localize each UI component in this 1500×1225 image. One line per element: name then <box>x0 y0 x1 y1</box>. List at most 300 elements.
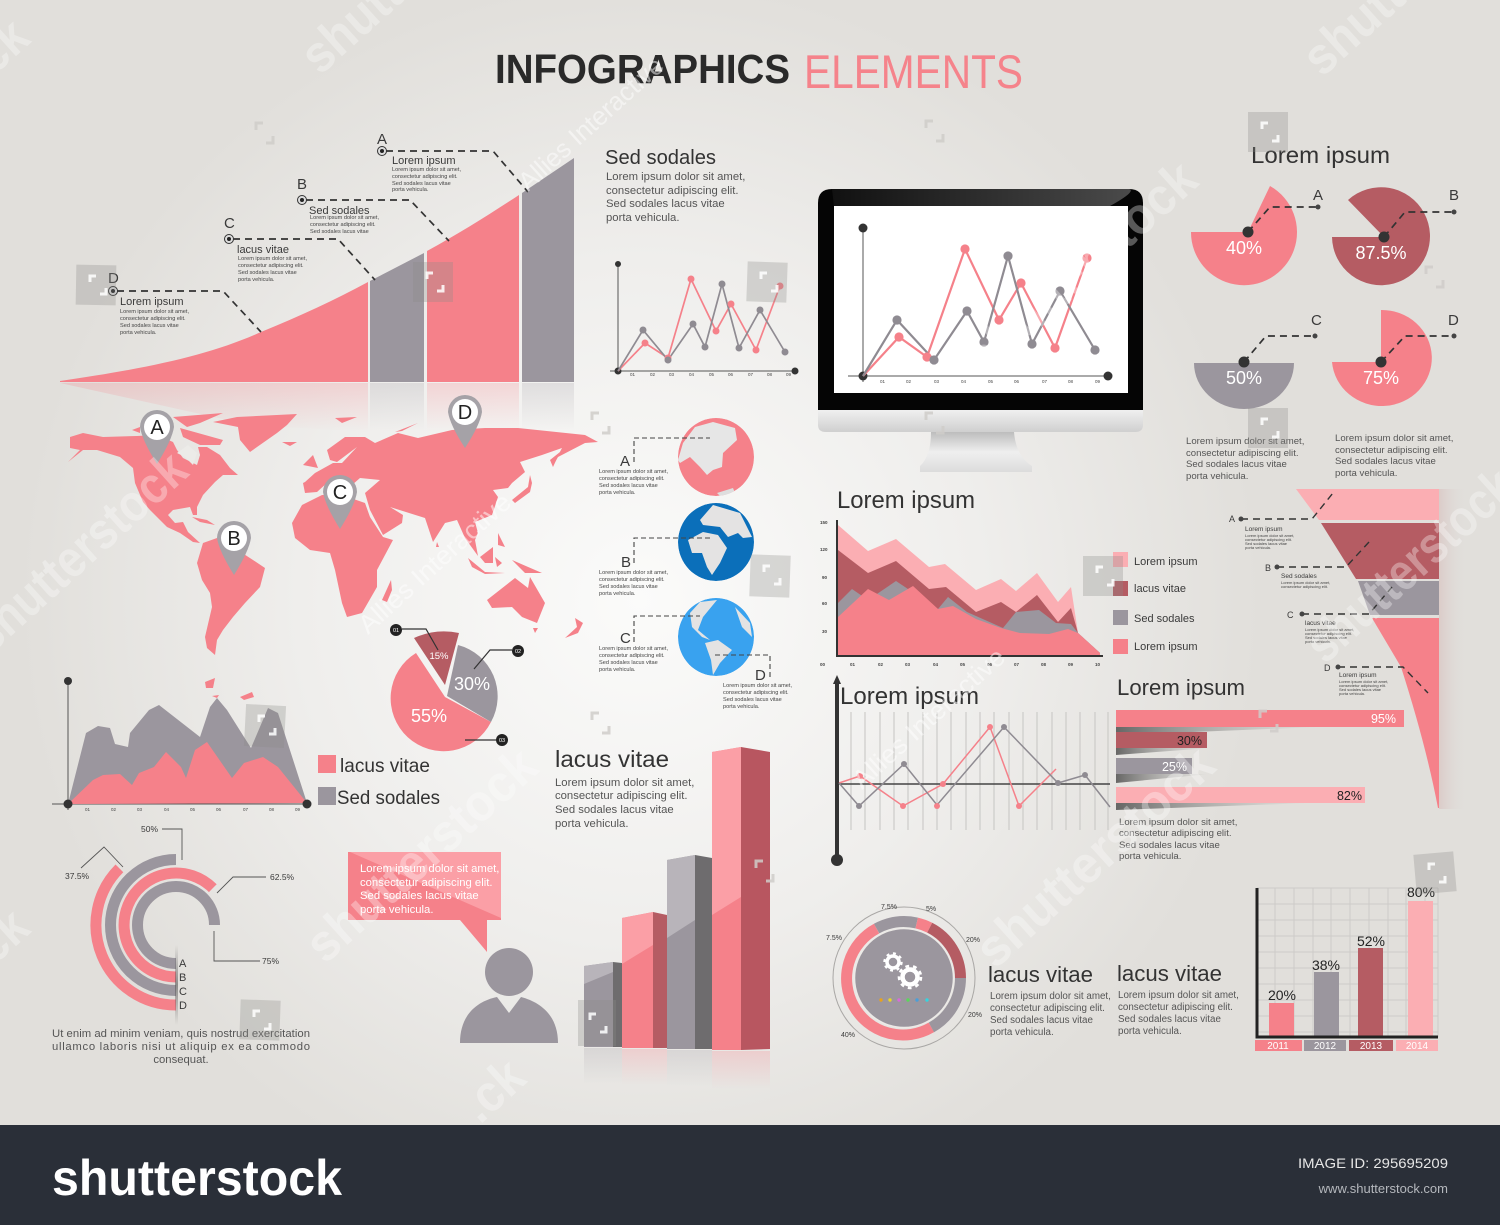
line chart: small: 03 <box>669 372 675 377</box>
pie B: 87.5% <box>1355 243 1407 263</box>
section C <box>1358 581 1439 615</box>
globe text B: B <box>621 554 631 571</box>
pin D: D <box>458 402 472 424</box>
red segment <box>930 928 960 978</box>
pin C <box>323 475 357 529</box>
bar 25: 25% <box>1162 760 1187 774</box>
pink slice <box>391 653 491 751</box>
axes <box>837 680 1110 860</box>
mountain area chart: 09 <box>295 807 301 812</box>
pie A <box>1191 186 1323 285</box>
pie B: B <box>1449 187 1459 204</box>
area segment three <box>427 195 519 382</box>
pie chart 55 30 15: 55% <box>411 706 447 726</box>
callout A: Lorem ipsum dolor sit amet, <box>1245 533 1294 538</box>
globe text D: porta vehicula. <box>723 704 760 710</box>
ring letters: A <box>179 958 187 970</box>
inner disc <box>854 928 954 1028</box>
percent labels: 20% <box>1268 987 1296 1003</box>
ring letters <box>179 958 187 1012</box>
callout A: A <box>377 131 387 148</box>
screen line chart: 06 <box>1014 379 1020 384</box>
monitor chin <box>818 410 1143 432</box>
bar 95: 95% <box>1371 712 1396 726</box>
bars <box>1269 1003 1294 1036</box>
text block: lacus vitae right: consectetur adipiscing elit. <box>1118 1002 1233 1013</box>
bar 30: 30% <box>1177 734 1202 748</box>
pin A <box>140 410 174 464</box>
text block: lacus vitae right: lacus vitae <box>1117 961 1222 986</box>
pink area <box>68 742 307 804</box>
bar 30 <box>1116 732 1210 755</box>
tick labels: 60 <box>822 601 828 606</box>
globe C <box>678 598 754 676</box>
paragraph: Sed sodales lacus vitae <box>1119 840 1220 851</box>
globe text A: A <box>620 453 630 470</box>
footer url: www.shutterstock.com <box>1318 1181 1448 1196</box>
heading and paragraph: Sed sodales <box>605 147 745 224</box>
ring letters: D <box>179 1000 187 1012</box>
globe text B: Lorem ipsum dolor sit amet, <box>599 570 668 576</box>
red slice <box>414 631 459 685</box>
vertical shadow <box>175 945 178 1025</box>
pie A: A <box>1313 187 1323 204</box>
text block: lacus vitae left: Sed sodales lacus vitae <box>990 1015 1093 1026</box>
callout C: consectetur adipiscing elit. <box>238 263 304 269</box>
callout lines <box>634 438 710 462</box>
pin C: C <box>333 482 347 504</box>
callout B: Sed sodales <box>1281 573 1318 580</box>
heading and paragraph: Sed sodales: Lorem ipsum dolor sit amet, <box>606 171 745 183</box>
tick labels: 150 <box>820 520 828 525</box>
heading and paragraph: lacus vitae: lacus vitae <box>555 746 669 772</box>
callout A: Sed sodales lacus vitae <box>1245 541 1288 546</box>
callout D: D <box>1324 663 1331 673</box>
text block: lacus vitae left <box>988 962 1111 1038</box>
Hudson bay <box>177 445 197 465</box>
screen line chart: 09 <box>1095 379 1101 384</box>
globe text A: consectetur adipiscing elit. <box>599 476 665 482</box>
watermark text: Allies Interactive <box>512 50 669 196</box>
icon: big gear <box>899 966 921 988</box>
heading and paragraph: lacus vitae: consectetur adipiscing elit. <box>555 790 688 802</box>
watermark text: shutterstock <box>964 735 1226 979</box>
tick labels: 120 <box>820 547 828 552</box>
heading and paragraph: Sed sodales: consectetur adipiscing elit. <box>606 185 738 197</box>
callout D <box>1324 663 1428 696</box>
icon: person <box>460 948 558 1043</box>
callout D: Sed sodales lacus vitae <box>120 323 179 329</box>
callout C: consectetur adipiscing elit. <box>1305 631 1352 636</box>
monitor gloss <box>832 189 1131 206</box>
paragraph right <box>1335 433 1453 479</box>
screen line chart: 01 <box>880 379 886 384</box>
globe text C: C <box>620 630 631 647</box>
bar chart 2011-2014 <box>1255 884 1438 1052</box>
legend: Lorem ipsum <box>1134 556 1198 568</box>
icon: small gear <box>884 953 902 971</box>
callout D: porta vehicula. <box>120 330 157 336</box>
screen line chart: 05 <box>988 379 994 384</box>
heading and paragraph: Sed sodales: porta vehicula. <box>606 212 679 224</box>
callout A: Lorem ipsum <box>392 155 456 167</box>
axes <box>837 520 1103 656</box>
tick labels: 09 <box>1068 662 1074 667</box>
callout B <box>1265 542 1369 589</box>
pin D <box>448 395 482 448</box>
callout B <box>297 176 449 241</box>
callout C: C <box>224 215 235 232</box>
callout C <box>224 215 375 283</box>
grey layer <box>838 581 1100 655</box>
year labels <box>1255 1040 1438 1052</box>
continents <box>68 413 598 700</box>
globe text D: Lorem ipsum dolor sit amet, <box>723 683 792 689</box>
area segment one <box>60 282 368 382</box>
screen line chart: 04 <box>961 379 967 384</box>
callout A: porta vehicula. <box>1245 545 1271 550</box>
section A <box>1296 489 1439 520</box>
globe text C: Lorem ipsum dolor sit amet, <box>599 646 668 652</box>
text block: lacus vitae left: Lorem ipsum dolor sit amet, <box>990 991 1111 1002</box>
funnel chart <box>1229 489 1467 809</box>
gauge with gears <box>826 904 982 1049</box>
globe text C <box>599 630 668 673</box>
chart: rising area with four callouts <box>60 131 574 432</box>
heading and paragraph: Sed sodales: Sed sodales lacus vitae <box>606 198 725 210</box>
annotations <box>81 829 266 961</box>
screen line chart <box>848 224 1112 384</box>
pie A: 40% <box>1226 238 1262 258</box>
mountain area chart: 05 <box>190 807 196 812</box>
callout D: consectetur adipiscing elit. <box>120 316 186 322</box>
legend: mountain chart: lacus vitae <box>340 755 430 777</box>
pink layer <box>838 586 1100 655</box>
text block: lacus vitae right: Lorem ipsum dolor sit amet, <box>1118 990 1239 1001</box>
pie C: C <box>1311 312 1322 329</box>
pie chart 55 30 15 <box>390 624 524 751</box>
paragraph right: Lorem ipsum dolor sit amet, <box>1335 433 1453 444</box>
watermark text: shutterstock <box>954 150 1209 387</box>
paragraph left: Sed sodales lacus vitae <box>1186 459 1287 470</box>
text block: lacus vitae left: lacus vitae <box>988 962 1093 987</box>
footer bar <box>0 1125 1500 1225</box>
watermark text: Allies Interactive <box>846 642 1011 794</box>
tick labels: 05 <box>960 662 966 667</box>
grey area <box>68 698 307 804</box>
gauge labels: 40% <box>841 1032 855 1039</box>
monitor screen <box>834 206 1128 393</box>
globe text D: Sed sodales lacus vitae <box>723 697 782 703</box>
gauge labels: 20% <box>966 937 980 944</box>
callout D <box>108 270 261 336</box>
watermark text: shutterstock <box>294 737 549 974</box>
paragraph under arcs: ullamco laboris nisi ut aliquip ex ea commodo <box>52 1041 310 1053</box>
section B <box>1321 523 1439 579</box>
bar 2012 <box>1314 972 1339 1036</box>
ring A <box>138 886 215 964</box>
paragraph: porta vehicula. <box>1119 851 1181 862</box>
gauge labels: 5% <box>926 906 936 913</box>
annotation labels: 75% <box>262 956 279 966</box>
mountain area chart: 07 <box>243 807 249 812</box>
title: ELEMENTS <box>804 45 1023 98</box>
globe text D: consectetur adipiscing elit. <box>723 690 789 696</box>
callout D: porta vehicula. <box>1339 691 1365 696</box>
marker 03: 03 <box>499 738 505 744</box>
grey series <box>839 727 1110 807</box>
line chart: small: 07 <box>748 372 754 377</box>
heading: Lorem ipsum <box>1117 675 1245 700</box>
light pink layer <box>838 525 1100 655</box>
paragraph under arcs: consequat. <box>153 1054 209 1066</box>
annotation labels: 62.5% <box>270 872 295 882</box>
pie C: 50% <box>1226 368 1262 388</box>
globe B <box>678 503 754 581</box>
bar 2014 <box>1408 901 1433 1036</box>
ring B <box>124 873 213 977</box>
pie D: D <box>1448 312 1459 329</box>
tick labels: 30 <box>822 629 828 634</box>
tick labels: 01 <box>850 662 856 667</box>
paragraph left <box>1186 436 1304 482</box>
heading: Lorem ipsum <box>840 683 979 710</box>
bar 82: 82% <box>1337 789 1362 803</box>
pie chart 55 30 15: 15% <box>429 651 449 662</box>
line chart: small: 08 <box>767 372 773 377</box>
monitor stand <box>920 432 1032 472</box>
callout B: B <box>297 176 307 193</box>
globe text C: Sed sodales lacus vitae <box>599 660 658 666</box>
globe text A: Lorem ipsum dolor sit amet, <box>599 469 668 475</box>
heading and paragraph: lacus vitae <box>555 746 694 830</box>
line chart with vertical grid <box>831 675 1110 866</box>
pie B <box>1332 187 1459 285</box>
text block: lacus vitae right: Sed sodales lacus vitae <box>1118 1014 1221 1025</box>
bar 95 <box>1116 710 1404 735</box>
callout B: consectetur adipiscing elit. <box>310 222 376 228</box>
gauge labels: 20% <box>968 1012 982 1019</box>
paragraph <box>1119 817 1237 862</box>
callout A: consectetur adipiscing elit. <box>1245 537 1292 542</box>
callout B: Sed sodales lacus vitae <box>310 229 369 235</box>
text block: lacus vitae left: porta vehicula. <box>990 1027 1054 1038</box>
globes with callouts <box>599 418 792 710</box>
legend: Lorem ipsum <box>1134 641 1198 653</box>
tick labels: 03 <box>905 662 911 667</box>
bar 3 <box>667 855 712 1049</box>
speech bubble <box>348 852 501 952</box>
callout B: B <box>1265 563 1271 573</box>
ring letters: C <box>179 986 187 998</box>
year labels: 2012 <box>1314 1041 1337 1052</box>
speech bubble: consectetur adipiscing elit. <box>360 877 492 889</box>
callout C: Sed sodales lacus vitae <box>1305 635 1348 640</box>
mountain area chart: 02 <box>111 807 117 812</box>
annotation labels: 50% <box>141 824 158 834</box>
screen line chart: 07 <box>1042 379 1048 384</box>
callout line B <box>634 538 710 563</box>
callout C: Lorem ipsum dolor sit amet, <box>238 256 307 262</box>
pink series <box>839 727 1056 806</box>
globe text C: porta vehicula. <box>599 667 636 673</box>
paragraph under arcs: Ut enim ad minim veniam, quis nostrud exercitation <box>52 1028 310 1040</box>
mountain area chart: 01 <box>85 807 91 812</box>
paragraph right: Sed sodales lacus vitae <box>1335 456 1436 467</box>
callout C: lacus vitae <box>237 244 289 256</box>
globe text D: D <box>755 667 766 684</box>
year labels: 2013 <box>1360 1041 1383 1052</box>
heading: Lorem ipsum <box>1251 142 1390 168</box>
paragraph left: porta vehicula. <box>1186 471 1248 482</box>
paragraph under arcs <box>52 1028 310 1066</box>
callout D: Sed sodales lacus vitae <box>1339 687 1382 692</box>
callout C <box>1287 587 1392 644</box>
percent labels: 80% <box>1407 884 1435 900</box>
bar 2013 <box>1358 948 1383 1036</box>
callout A: Lorem ipsum dolor sit amet, <box>392 167 461 173</box>
speech bubble: Lorem ipsum dolor sit amet, <box>360 863 499 875</box>
callout C: C <box>1287 610 1294 620</box>
gauge labels: 7.5% <box>881 904 897 911</box>
callout D: D <box>108 270 119 287</box>
paragraph: consectetur adipiscing elit. <box>1119 828 1232 839</box>
watermark text: Allies Interactive <box>352 487 517 639</box>
callout D: Lorem ipsum <box>1339 672 1377 679</box>
percent labels: 38% <box>1312 957 1340 973</box>
marker 01: 01 <box>393 628 399 634</box>
pink segment <box>847 929 931 1035</box>
legend <box>1113 552 1198 654</box>
bar 4 <box>712 747 770 1050</box>
gauge labels: 7.5% <box>826 935 842 942</box>
bar 82 <box>1116 787 1365 810</box>
globe text B <box>599 554 668 597</box>
heading: Lorem ipsum <box>837 487 975 514</box>
bubble highlight <box>350 852 501 918</box>
mountain area chart: 04 <box>164 807 170 812</box>
callout C: lacus vitae <box>1305 620 1336 627</box>
callout line C <box>634 616 700 642</box>
line chart: small <box>610 261 798 377</box>
annotation labels <box>65 824 295 966</box>
paragraph: Lorem ipsum dolor sit amet, <box>1119 817 1237 828</box>
footer logo: shutterstock <box>52 1150 342 1206</box>
heading and paragraph: Sed sodales: Sed sodales <box>605 147 716 169</box>
funnel shadow <box>1439 489 1467 809</box>
globe text A: porta vehicula. <box>599 490 636 496</box>
small pink segment <box>917 923 930 928</box>
bar reflections <box>584 1048 770 1089</box>
ring D <box>96 868 176 1005</box>
callout D: consectetur adipiscing elit. <box>1339 683 1386 688</box>
callout line D <box>713 655 770 677</box>
callout C: Sed sodales lacus vitae <box>238 270 297 276</box>
screen line chart: 08 <box>1068 379 1074 384</box>
text block: lacus vitae left: consectetur adipiscing elit. <box>990 1003 1105 1014</box>
tick labels: 04 <box>933 662 939 667</box>
mountain area chart: 03 <box>137 807 143 812</box>
callout A: porta vehicula. <box>392 187 429 193</box>
legend: lacus vitae <box>1134 583 1186 595</box>
grey top segment <box>877 922 917 929</box>
stacked area chart <box>820 487 1198 667</box>
callout C: porta vehicula. <box>238 277 275 283</box>
watermark text: .ck <box>449 1047 536 1134</box>
title <box>495 45 1023 98</box>
heading and paragraph: lacus vitae: Lorem ipsum dolor sit amet, <box>555 777 694 789</box>
axes <box>1257 888 1438 1037</box>
marker 02: 02 <box>515 649 521 655</box>
mountain area chart: 08 <box>269 807 275 812</box>
bar 1 <box>584 962 622 1047</box>
legend: mountain chart <box>318 755 440 809</box>
tick labels: 90 <box>822 575 828 580</box>
percent labels <box>1268 884 1435 1003</box>
callout D: Lorem ipsum <box>120 296 184 308</box>
text block: lacus vitae right: porta vehicula. <box>1118 1026 1182 1037</box>
colored dots <box>879 998 929 1002</box>
paragraph right: consectetur adipiscing elit. <box>1335 445 1448 456</box>
grey right segment <box>931 978 960 1027</box>
callout B: Lorem ipsum dolor sit amet, <box>1281 580 1330 585</box>
percent labels: 52% <box>1357 933 1385 949</box>
heading and paragraph: lacus vitae: porta vehicula. <box>555 818 628 830</box>
pie chart 55 30 15: 30% <box>454 674 490 694</box>
text block: lacus vitae right <box>1117 961 1239 1037</box>
grid lines <box>851 712 1108 830</box>
paragraph left: consectetur adipiscing elit. <box>1186 448 1299 459</box>
reflection <box>60 383 574 432</box>
monitor with line chart <box>818 189 1143 472</box>
tick labels: 02 <box>878 662 884 667</box>
pin B: B <box>227 528 241 550</box>
pie D <box>1332 310 1459 406</box>
area segment four <box>522 158 574 382</box>
concentric arc chart <box>65 824 295 1025</box>
3D bar chart <box>584 747 770 1089</box>
pin A: A <box>150 417 164 439</box>
callout B: Sed sodales <box>309 205 370 217</box>
line chart: small: 02 <box>650 372 656 377</box>
callout B: consectetur adipiscing elit. <box>1281 584 1328 589</box>
tick labels: 00 <box>820 662 826 667</box>
callout A <box>377 131 528 193</box>
callout A: consectetur adipiscing elit. <box>392 174 458 180</box>
tick labels: 06 <box>987 662 993 667</box>
globe A <box>678 418 754 496</box>
heading and paragraph: lacus vitae: Sed sodales lacus vitae <box>555 804 674 816</box>
line chart: small: 06 <box>728 372 734 377</box>
callout A: Lorem ipsum <box>1245 526 1283 533</box>
panel: pie percentages <box>1186 142 1459 482</box>
grid <box>1257 888 1438 1037</box>
bar 2 <box>622 912 667 1048</box>
ring C <box>110 860 176 990</box>
globe text B: consectetur adipiscing elit. <box>599 577 665 583</box>
tick labels: 08 <box>1041 662 1047 667</box>
tick labels: 10 <box>1095 662 1101 667</box>
footer image id: IMAGE ID: 295695209 <box>1298 1155 1448 1171</box>
paragraph left: Lorem ipsum dolor sit amet, <box>1186 436 1304 447</box>
globe text D <box>723 667 792 710</box>
gauge labels <box>826 904 982 1039</box>
tick labels: 07 <box>1014 662 1020 667</box>
line chart: small: 05 <box>709 372 715 377</box>
year labels: 2014 <box>1406 1041 1429 1052</box>
line chart: small: 01 <box>630 372 636 377</box>
callout D: Lorem ipsum dolor sit amet, <box>1339 679 1388 684</box>
